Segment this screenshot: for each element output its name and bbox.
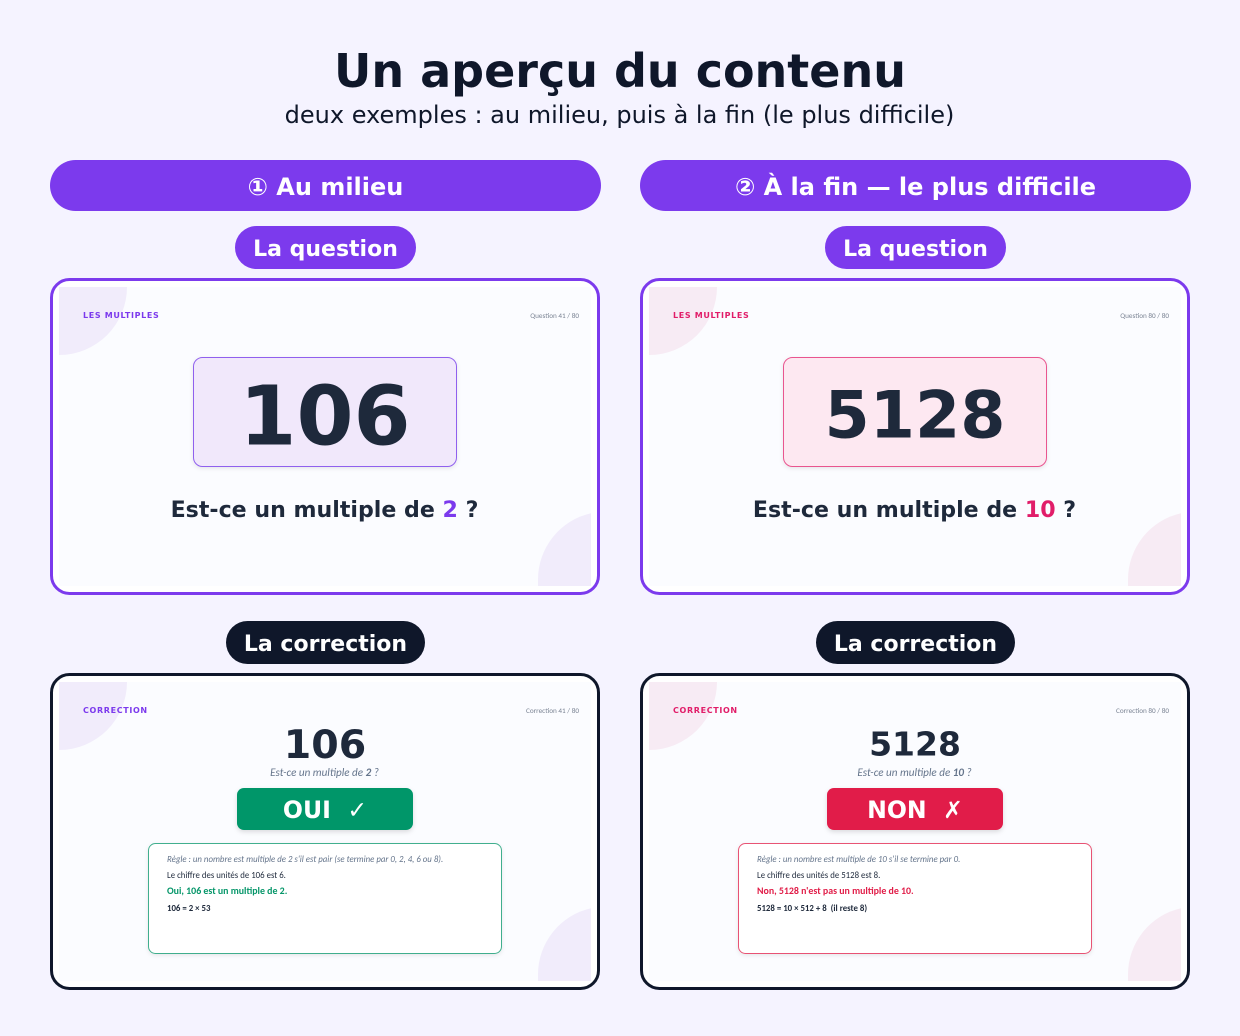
question text: Est-ce un multiple de 10 ? (753, 497, 1076, 523)
column header: à la fin: ② À la fin — le plus difficile (735, 172, 1096, 201)
answer badge: oui: OUI ✓ (283, 796, 367, 824)
panel: correction 106 (52, 674, 598, 988)
answer badge: non (827, 788, 1003, 830)
slide label: CORRECTION (83, 706, 148, 715)
conclusion: Non, 5128 n'est pas un multiple de 10. (757, 885, 914, 897)
number box: 5128 (825, 378, 1005, 454)
pill: la correction gauche: La correction (244, 632, 407, 657)
pill: la question droite: La question (843, 237, 988, 262)
pill: la question gauche (235, 226, 416, 269)
number: 5128 (869, 724, 961, 764)
pill: la question droite (825, 226, 1006, 269)
number: 106 (284, 722, 366, 768)
subtitle: deux exemples : au milieu, puis à la fin (le plus difficile) (285, 101, 954, 129)
slide counter: Correction 80 / 80 (1116, 706, 1169, 715)
answer badge: non: NON ✗ (867, 796, 963, 824)
slide label: CORRECTION (673, 706, 738, 715)
step: Le chiffre des unités de 5128 est 8. (757, 871, 880, 881)
question text: Est-ce un multiple de 10 ? (857, 765, 972, 779)
question text: Est-ce un multiple de 2 ? (171, 497, 478, 523)
pill: la correction droite: La correction (834, 632, 997, 657)
slide counter: Question 80 / 80 (1120, 311, 1169, 320)
number box (194, 358, 456, 466)
explanation box (738, 844, 1092, 954)
explanation box (148, 844, 502, 954)
slide counter: Correction 41 / 80 (526, 706, 579, 715)
column header: au milieu (50, 160, 601, 211)
rule: Règle : un nombre est multiple de 10 s'il se termine par 0. (757, 855, 960, 865)
number box: 106 (239, 370, 411, 464)
calculation: 106 = 2 × 53 (167, 904, 211, 914)
panel: correction 5128 (642, 674, 1188, 988)
column header: au milieu: ① Au milieu (248, 173, 403, 201)
column header: à la fin (640, 160, 1191, 211)
pill: la question gauche: La question (253, 237, 398, 262)
title: Un aperçu du contenu (334, 44, 906, 98)
panel: question 5128 (642, 280, 1188, 594)
panel: question 106 (52, 280, 598, 594)
number box (784, 358, 1046, 466)
pill: la correction gauche (226, 621, 425, 664)
conclusion: Oui, 106 est un multiple de 2. (167, 885, 288, 897)
slide counter: Question 41 / 80 (530, 311, 579, 320)
question text: Est-ce un multiple de 2 ? (270, 765, 379, 779)
pill: la correction droite (816, 621, 1015, 664)
slide label: LES MULTIPLES (83, 311, 159, 320)
rule: Règle : un nombre est multiple de 2 s'il est pair (se termine par 0, 2, 4, 6 ou 8). (167, 855, 443, 865)
slide label: LES MULTIPLES (673, 311, 749, 320)
answer badge: oui (237, 788, 413, 830)
step: Le chiffre des unités de 106 est 6. (167, 871, 286, 881)
calculation: 5128 = 10 × 512 + 8 (il reste 8) (757, 904, 867, 914)
